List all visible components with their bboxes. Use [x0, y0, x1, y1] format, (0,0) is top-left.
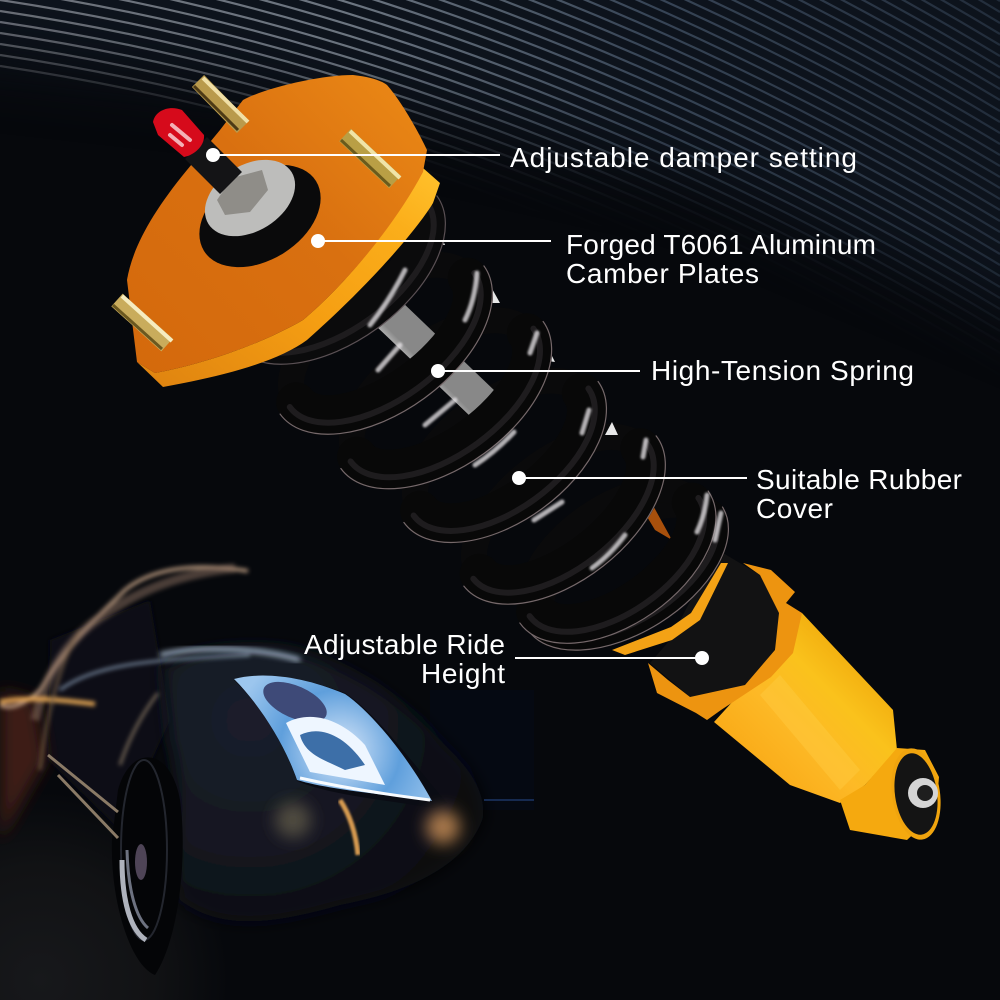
- lower mount: [840, 748, 939, 840]
- car photo: [0, 567, 534, 1000]
- callout: Suitable Rubber Cover: [512, 464, 962, 524]
- callout: Forged T6061 Aluminum Camber Plates: Camber Plates: [566, 258, 759, 289]
- right stud: [341, 131, 400, 186]
- nut: [217, 170, 268, 215]
- brake glint: [135, 844, 147, 880]
- ground: [0, 790, 230, 1000]
- callout: Adjustable damper setting: [206, 142, 857, 173]
- hood highlight: [160, 649, 300, 660]
- background with curved streak lines: [0, 0, 1000, 332]
- callout: Adjustable damper setting: Adjustable damper setting: [510, 142, 857, 173]
- plate top face: [127, 75, 427, 373]
- callout: Suitable Rubber Cover: Cover: [756, 493, 833, 524]
- left stud: [113, 296, 172, 349]
- sill lines: [48, 755, 118, 838]
- car side: [48, 600, 170, 830]
- rubber cover: [650, 553, 779, 697]
- wheel rim: [121, 760, 167, 940]
- callout: Adjustable Ride Height: Height: [421, 658, 505, 689]
- orange panel glow: [0, 690, 46, 840]
- adjuster ring: [612, 563, 728, 655]
- plate rim: [137, 168, 440, 387]
- orange collar: [648, 563, 802, 720]
- rubber seat: [181, 144, 339, 288]
- callout: Forged T6061 Aluminum Camber Plates: [311, 229, 876, 289]
- callout: Forged T6061 Aluminum Camber Plates: Forged T6061 Aluminum: [566, 229, 876, 260]
- coilover: [113, 75, 946, 843]
- stem: [196, 148, 231, 183]
- callout: High-Tension Spring: [431, 355, 914, 386]
- rear stud: [194, 78, 248, 130]
- callout: High-Tension Spring: High-Tension Spring: [651, 355, 914, 386]
- navy night haze: [430, 690, 534, 810]
- red cap: [153, 108, 204, 157]
- damper shaft: [375, 300, 520, 440]
- yellow shock body: [714, 612, 897, 803]
- shaft glimpses: [420, 229, 618, 435]
- camber plate: [113, 75, 440, 387]
- spring gloss highlights: [370, 270, 721, 568]
- car hood and bumper: [162, 647, 484, 921]
- headlight: [234, 674, 447, 808]
- orange interior glimpses: [560, 500, 672, 622]
- light trails: [0, 567, 250, 770]
- mount eye: [886, 745, 946, 843]
- fog light glows: [275, 800, 460, 855]
- tyre: [112, 757, 183, 975]
- washer: [191, 144, 309, 252]
- spring front halves: [233, 196, 757, 684]
- callout: Adjustable Ride Height: Adjustable Ride: [304, 629, 505, 660]
- spring back halves: [266, 236, 706, 618]
- callout: Suitable Rubber Cover: Suitable Rubber: [756, 464, 962, 495]
- callout: Adjustable Ride Height: [304, 629, 709, 689]
